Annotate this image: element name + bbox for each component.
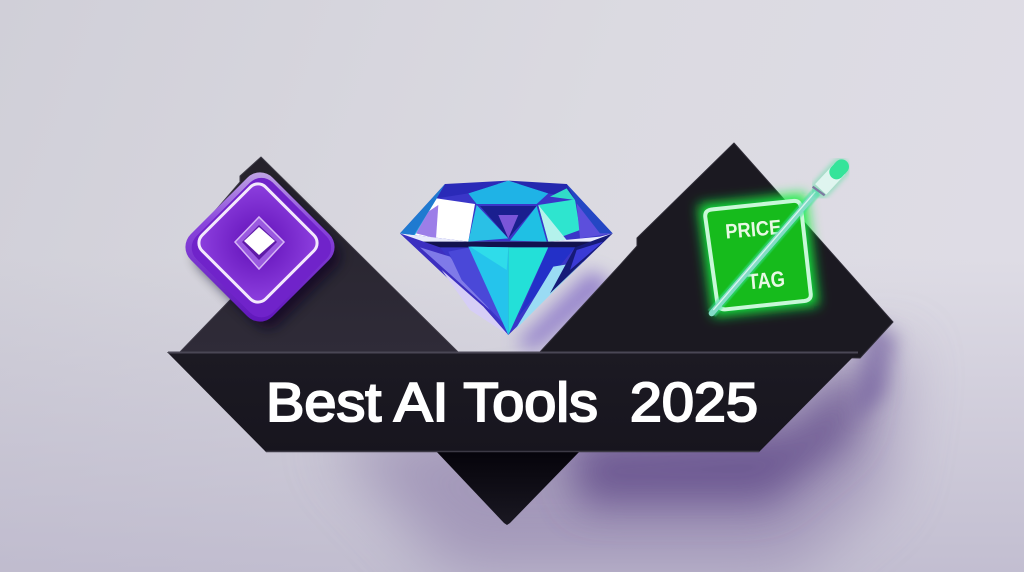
pen — [712, 167, 842, 313]
icon: purple rounded square — [178, 165, 347, 335]
ribbon title: Best AI Tools 2025 — [266, 371, 758, 433]
icon: gem diamond — [400, 181, 613, 335]
tag body — [705, 201, 811, 309]
right dark panel — [540, 143, 893, 358]
icon core diamond — [235, 217, 284, 269]
bottom triangle point — [435, 450, 581, 525]
drop shadows — [330, 270, 905, 570]
tag glow — [705, 200, 812, 310]
tag label: PRICE — [724, 216, 782, 244]
tag label — [724, 216, 786, 294]
tag label: TAG — [747, 266, 786, 294]
icon: green price tag — [705, 167, 842, 313]
ribbon banner — [167, 352, 858, 452]
left dark triangle panel — [180, 157, 458, 352]
